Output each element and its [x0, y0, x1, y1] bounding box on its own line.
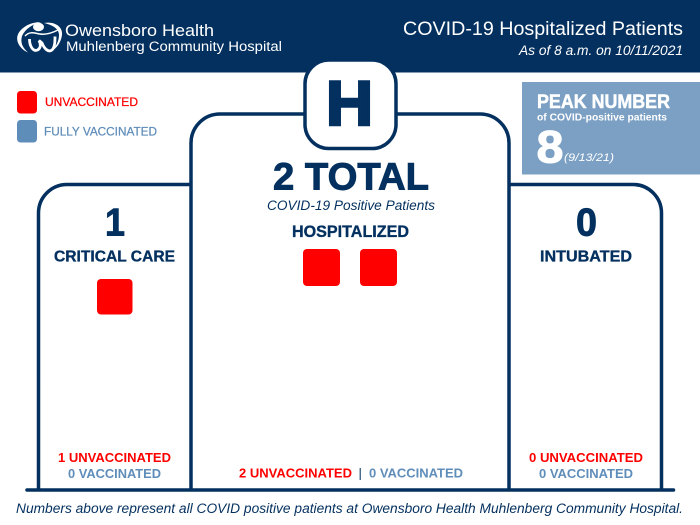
icon: hospital H badge — [305, 60, 396, 148]
legend label: unvaccinated: UNVACCINATED — [45, 95, 138, 109]
critical care heading: CRITICAL CARE — [54, 248, 175, 266]
panel: critical care — [38, 184, 191, 490]
hospitalized unvaccinated count: 2 UNVACCINATED — [239, 466, 352, 480]
peak heading: PEAK NUMBER — [537, 91, 670, 113]
intubated count: 0 — [576, 202, 597, 244]
peak value: 8 — [536, 122, 564, 172]
panel: peak number — [522, 82, 700, 174]
legend swatch: unvaccinated — [17, 91, 37, 114]
logo wordmark: Muhlenberg Community Hospital — [66, 39, 282, 54]
peak subheading: of COVID-positive patients — [537, 112, 667, 124]
patient marker: unvaccinated — [97, 279, 132, 314]
logo wordmark — [65, 21, 282, 54]
date subtitle: As of 8 a.m. on 10/11/2021 — [518, 43, 683, 58]
hospitalized vaccinated count: 0 VACCINATED — [369, 466, 463, 480]
separator: | — [358, 466, 362, 480]
peak date: (9/13/21) — [564, 152, 614, 164]
panel: hospitalized — [191, 114, 509, 490]
patient marker: unvaccinated 1 — [303, 249, 340, 286]
intubated heading: INTUBATED — [540, 248, 632, 266]
critical care vaccinated count: 0 VACCINATED — [68, 466, 161, 481]
legend swatch: fully vaccinated — [17, 120, 37, 142]
header banner — [0, 0, 700, 72]
critical care count: 1 — [105, 202, 125, 244]
legend — [17, 91, 157, 142]
intubated vaccinated count: 0 VACCINATED — [539, 466, 633, 481]
hospitalized heading: HOSPITALIZED — [292, 223, 409, 241]
patient marker: unvaccinated 2 — [360, 249, 397, 286]
icon: hospital logo — [17, 22, 62, 52]
baseline rule — [27, 488, 674, 492]
footnote: Numbers above represent all COVID positive patients at Owensboro Health Muhlenberg Community Hospital. — [16, 501, 683, 516]
total count: 2 TOTAL — [273, 156, 429, 198]
icon: hospital H badge: H — [326, 69, 373, 139]
panel: intubated — [509, 184, 662, 490]
intubated unvaccinated count: 0 UNVACCINATED — [529, 450, 643, 465]
title: COVID-19 Hospitalized Patients — [403, 19, 683, 40]
legend label: fully vaccinated: FULLY VACCINATED — [44, 124, 157, 138]
critical care unvaccinated count: 1 UNVACCINATED — [58, 450, 171, 465]
total caption: COVID-19 Positive Patients — [267, 198, 435, 213]
logo wordmark: Owensboro Health — [65, 21, 214, 40]
